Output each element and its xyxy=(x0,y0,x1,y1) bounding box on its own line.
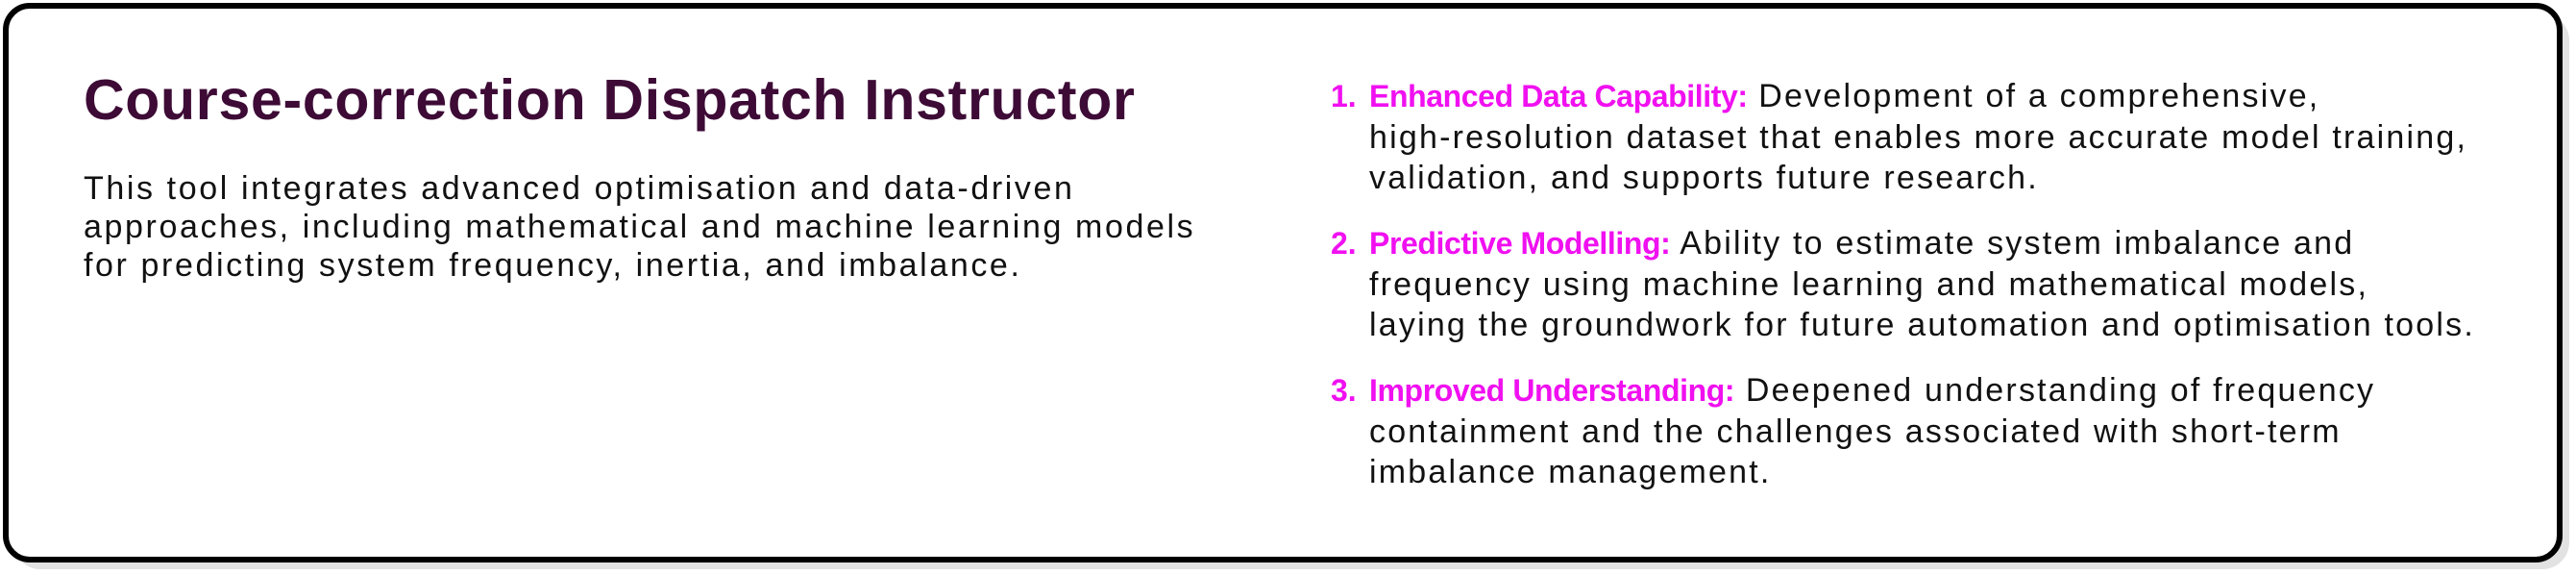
list item 3 xyxy=(1331,372,2375,490)
list item 1 xyxy=(1331,78,2467,196)
text block: description: This tool integrates advanced optimisation and data-driven xyxy=(84,170,1075,207)
list item 2: 2. xyxy=(1331,226,1357,261)
list item 1: 1. xyxy=(1331,79,1357,113)
title: Course-correction Dispatch Instructor xyxy=(84,68,1136,132)
list item 2: Predictive Modelling: Ability to estimate system imbalance and xyxy=(1369,225,2354,262)
list item 3: imbalance management. xyxy=(1369,454,1772,490)
list item 3: containment and the challenges associated with short-term xyxy=(1369,413,2342,450)
list item 1: high-resolution dataset that enables more accurate model training, xyxy=(1369,119,2467,156)
list item 1: validation, and supports future research. xyxy=(1369,160,2039,196)
text block: description: for predicting system frequency, inertia, and imbalance. xyxy=(84,247,1022,284)
list item 2: laying the groundwork for future automation and optimisation tools. xyxy=(1369,307,2475,343)
list item 2: frequency using machine learning and mathematical models, xyxy=(1369,265,2368,302)
list item 2 xyxy=(1331,225,2475,343)
list item 1: Enhanced Data Capability: Development of a comprehensive, xyxy=(1369,78,2319,114)
text block: description: approaches, including mathematical and machine learning models xyxy=(84,209,1195,245)
list item 3: Improved Understanding: Deepened understanding of frequency xyxy=(1369,372,2375,409)
text block: description xyxy=(84,170,1195,284)
list item 3: 3. xyxy=(1331,373,1357,408)
